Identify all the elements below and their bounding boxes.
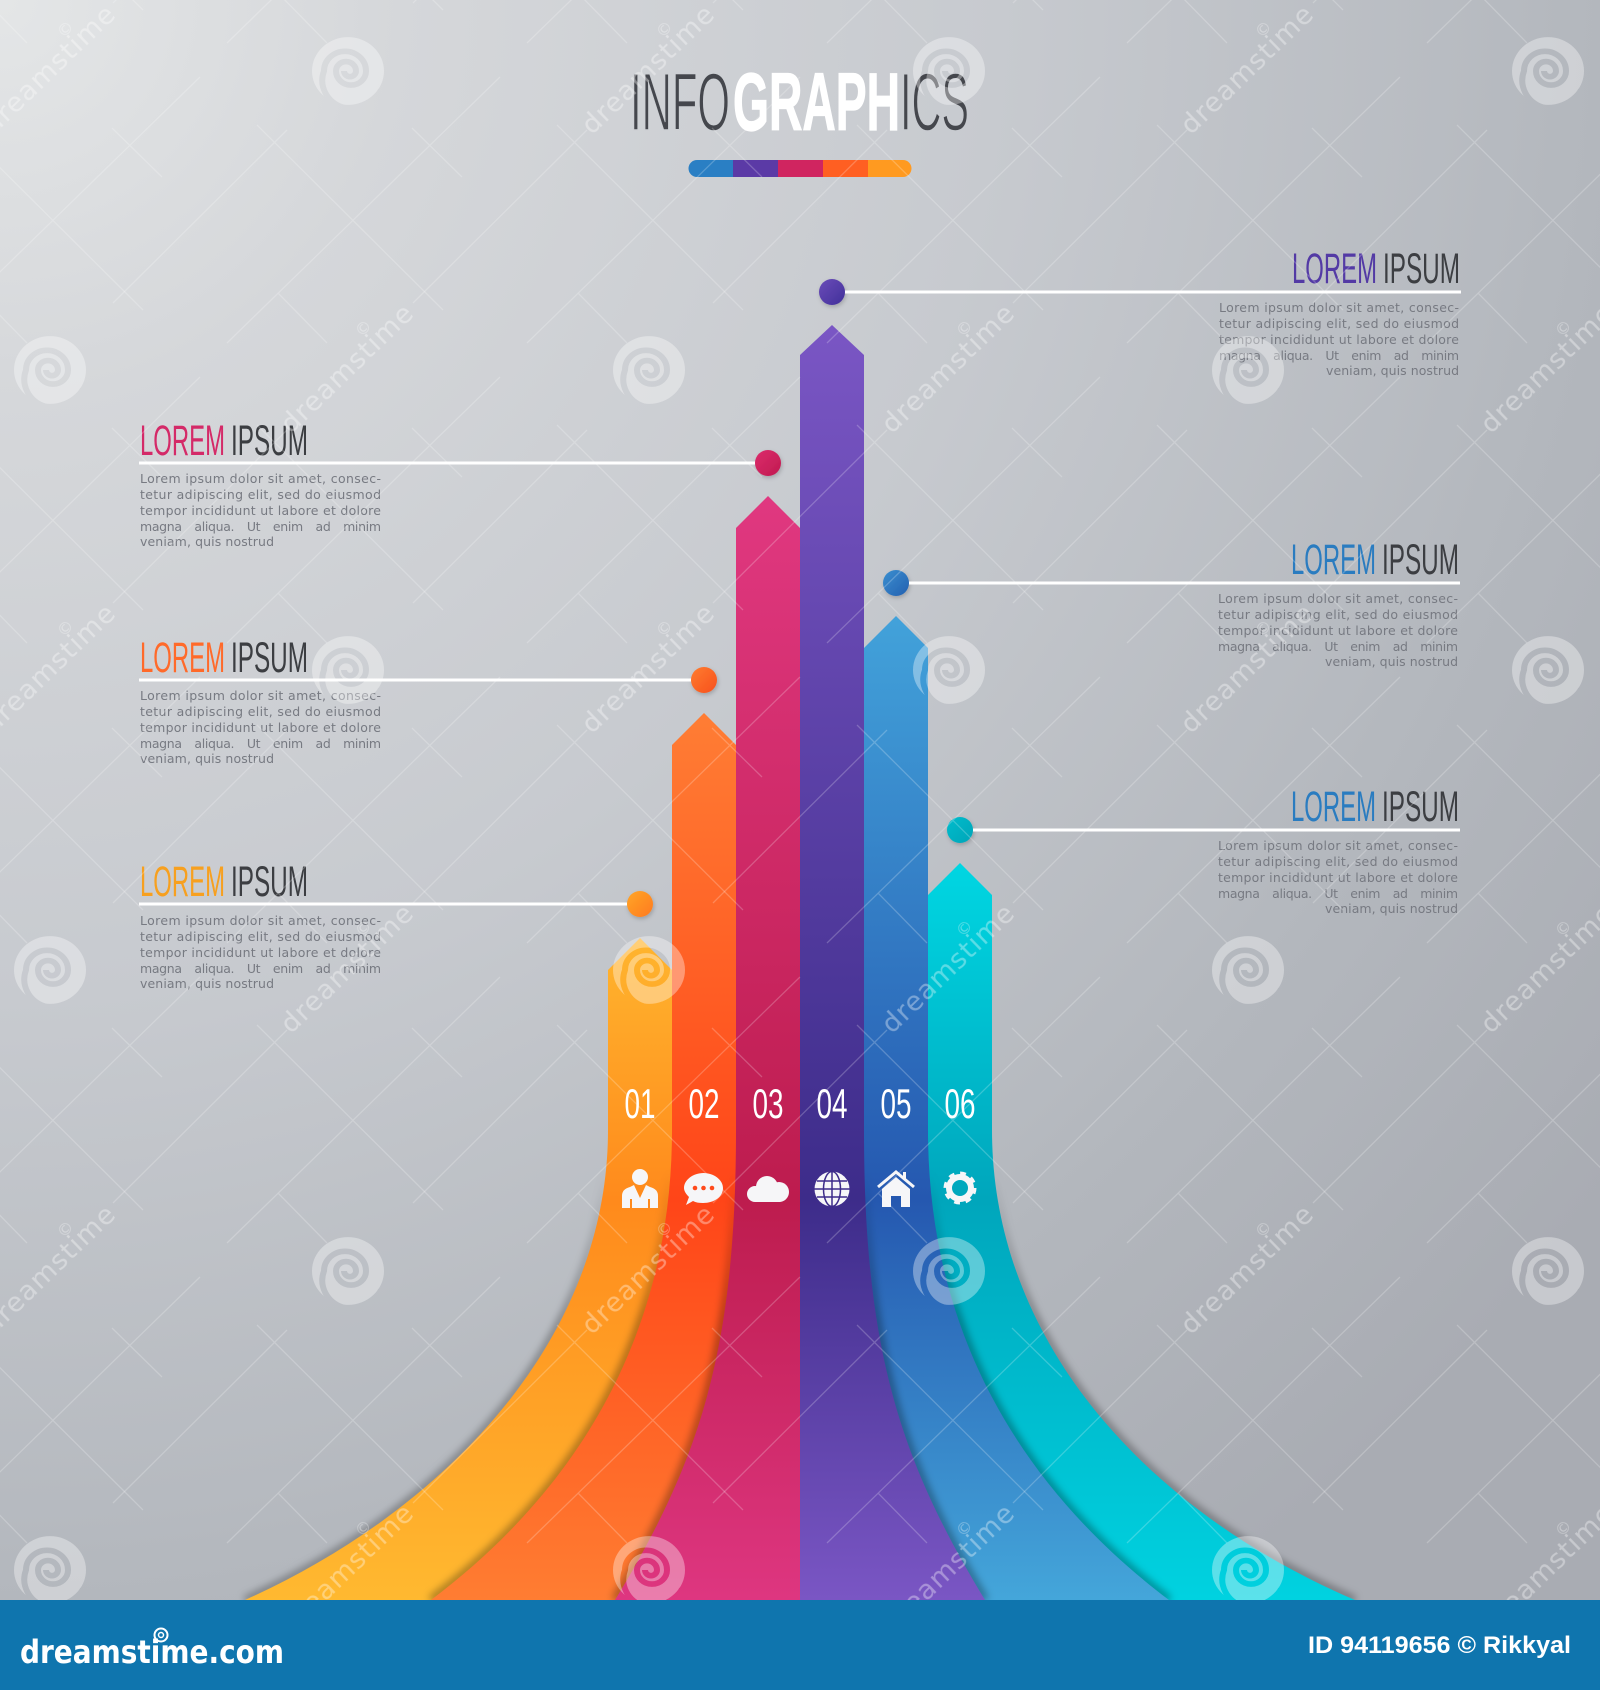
callout 05: blue dot, leader and text: magna aliqua. Ut enim ad minim [1218,639,1458,654]
step numbers [624,1080,976,1127]
callout 04: purple dot, leader and text: LOREM [1292,245,1377,293]
callout 06: teal dot, leader and text: tempor incididunt ut labore et dolore [1218,870,1458,885]
watermark text: © [53,616,78,641]
callout 06: teal dot, leader and text: tetur adipiscing elit, sed do eiusmod [1218,854,1458,869]
callout 04: purple dot, leader and text: magna aliqua. Ut enim ad minim [1219,348,1459,363]
callout 06: teal dot, leader and text: LOREM [1291,783,1376,831]
callout 05: blue dot, leader and text: veniam, quis nostrud [1325,654,1458,669]
callout 01: yellow dot, leader and text: tempor incididunt ut labore et dolore [140,945,381,960]
arrow 03 crimson [615,496,800,1600]
callout 02: orange dot, leader and text: LOREM [140,634,225,682]
watermark text: © [1251,616,1276,641]
watermark text: © [351,316,376,341]
callout 03: crimson dot, leader and text: Lorem ipsum dolor sit amet, consec- [140,471,381,486]
arrow 01 yellow [245,938,672,1600]
watermark text: © [53,1217,78,1242]
step numbers: 03 [752,1080,784,1127]
callout 03: crimson dot, leader and text: magna aliqua. Ut enim ad minim [140,519,381,534]
arrow 05 blue [864,616,1169,1600]
watermark text: dreamstime [575,1199,721,1341]
callout 05: blue dot, leader and text: Lorem ipsum dolor sit amet, consec- [1218,591,1458,606]
step numbers: 06 [944,1080,976,1127]
title: ICS [900,57,969,148]
watermark text: dreamstime [274,1498,420,1640]
watermark text: dreamstime [575,0,721,141]
callout 05: blue dot, leader and text: tempor incididunt ut labore et dolore [1218,623,1458,638]
watermark text: © [1551,916,1576,941]
icon: cloud [747,1176,789,1202]
callout 04: purple dot, leader and text: Lorem ipsum dolor sit amet, consec- [1219,300,1459,315]
watermark text: © [351,1516,376,1541]
callout 04: purple dot, leader and text: tempor incididunt ut labore et dolore [1219,332,1459,347]
watermark text: © [1251,17,1276,42]
watermark text: © [1251,1217,1276,1242]
step numbers: 04 [816,1080,848,1127]
callout 01: yellow dot, leader and text: magna aliqua. Ut enim ad minim [140,961,381,976]
watermark text: dreamstime [274,298,420,440]
callout 03: crimson dot, leader and text: tetur adipiscing elit, sed do eiusmod [140,487,381,502]
watermark text: © [652,17,677,42]
callout 02: orange dot, leader and text: magna aliqua. Ut enim ad minim [140,736,381,751]
callout 05: blue dot, leader and text [883,536,1460,669]
callout 03: crimson dot, leader and text: veniam, quis nostrud [140,534,274,549]
arrow 04 purple [800,325,985,1600]
step numbers: 02 [688,1080,720,1127]
title [630,57,969,148]
callout 06: teal dot, leader and text: IPSUM [1382,783,1459,831]
callout 04: purple dot, leader and text: IPSUM [1383,245,1460,293]
arrow 06 teal [928,863,1355,1600]
footer logo: dreamstime.com [20,1633,284,1671]
watermark text: dreamstime [875,898,1021,1040]
callout 04: purple dot, leader and text: tetur adipiscing elit, sed do eiusmod [1219,316,1459,331]
step numbers: 05 [880,1080,912,1127]
callout 06: teal dot, leader and text: veniam, quis nostrud [1325,901,1458,916]
footer image id: ID 94119656 © Rikkyal [1308,1632,1571,1659]
watermark text: dreamstime [575,598,721,740]
icon: speech bubble [684,1173,723,1205]
footer banner [0,1600,1600,1690]
watermark text: dreamstime [875,298,1021,440]
callout 06: teal dot, leader and text [947,783,1460,916]
callout 02: orange dot, leader and text: tempor incididunt ut labore et dolore [140,720,381,735]
callout 01: yellow dot, leader and text: LOREM [140,858,225,906]
callout 01: yellow dot, leader and text: Lorem ipsum dolor sit amet, consec- [140,913,381,928]
bar chart: six arrows flaring at the base [245,325,1355,1600]
callout 05: blue dot, leader and text: LOREM [1291,536,1376,584]
callout 01: yellow dot, leader and text [139,858,653,991]
callout 03: crimson dot, leader and text: IPSUM [231,417,308,465]
callout 01: yellow dot, leader and text: tetur adipiscing elit, sed do eiusmod [140,929,381,944]
title colour bar [688,160,912,177]
watermark text: © [652,616,677,641]
watermark text: dreamstime [1174,0,1320,141]
watermark text: dreamstime [274,898,420,1040]
watermark text: © [952,316,977,341]
watermark text: © [952,916,977,941]
watermark text: © [53,17,78,42]
callout 05: blue dot, leader and text: tetur adipiscing elit, sed do eiusmod [1218,607,1458,622]
title: GRAPH [733,57,900,148]
callout 06: teal dot, leader and text: magna aliqua. Ut enim ad minim [1218,886,1458,901]
callout 04: purple dot, leader and text [819,245,1461,378]
callout 02: orange dot, leader and text: veniam, quis nostrud [140,751,274,766]
callout 02: orange dot, leader and text [139,634,717,766]
watermark text: dreamstime [875,1498,1021,1640]
callout 01: yellow dot, leader and text: IPSUM [231,858,308,906]
title: INFO [630,57,730,148]
step numbers: 01 [624,1080,656,1127]
watermark text: © [952,1516,977,1541]
watermark text: dreamstime [1174,1199,1320,1341]
watermark text: dreamstime [1174,598,1320,740]
watermark text: © [1551,1516,1576,1541]
icon: globe [814,1172,850,1206]
callout 03: crimson dot, leader and text [139,417,781,549]
callout 06: teal dot, leader and text: Lorem ipsum dolor sit amet, consec- [1218,838,1458,853]
watermark text: © [1551,316,1576,341]
arrow 02 orange [431,713,736,1600]
callout 02: orange dot, leader and text: IPSUM [231,634,308,682]
callout 02: orange dot, leader and text: tetur adipiscing elit, sed do eiusmod [140,704,381,719]
callout 05: blue dot, leader and text: IPSUM [1382,536,1459,584]
callout 04: purple dot, leader and text: veniam, quis nostrud [1326,363,1459,378]
callout 03: crimson dot, leader and text: LOREM [140,417,225,465]
watermark text: © [351,916,376,941]
callout 03: crimson dot, leader and text: tempor incididunt ut labore et dolore [140,503,381,518]
callout 01: yellow dot, leader and text: veniam, quis nostrud [140,976,274,991]
icon: person [622,1169,658,1208]
watermark text: © [652,1217,677,1242]
icon: gear [946,1174,974,1202]
callout 02: orange dot, leader and text: Lorem ipsum dolor sit amet, consec- [140,688,381,703]
icon: house [878,1172,914,1207]
